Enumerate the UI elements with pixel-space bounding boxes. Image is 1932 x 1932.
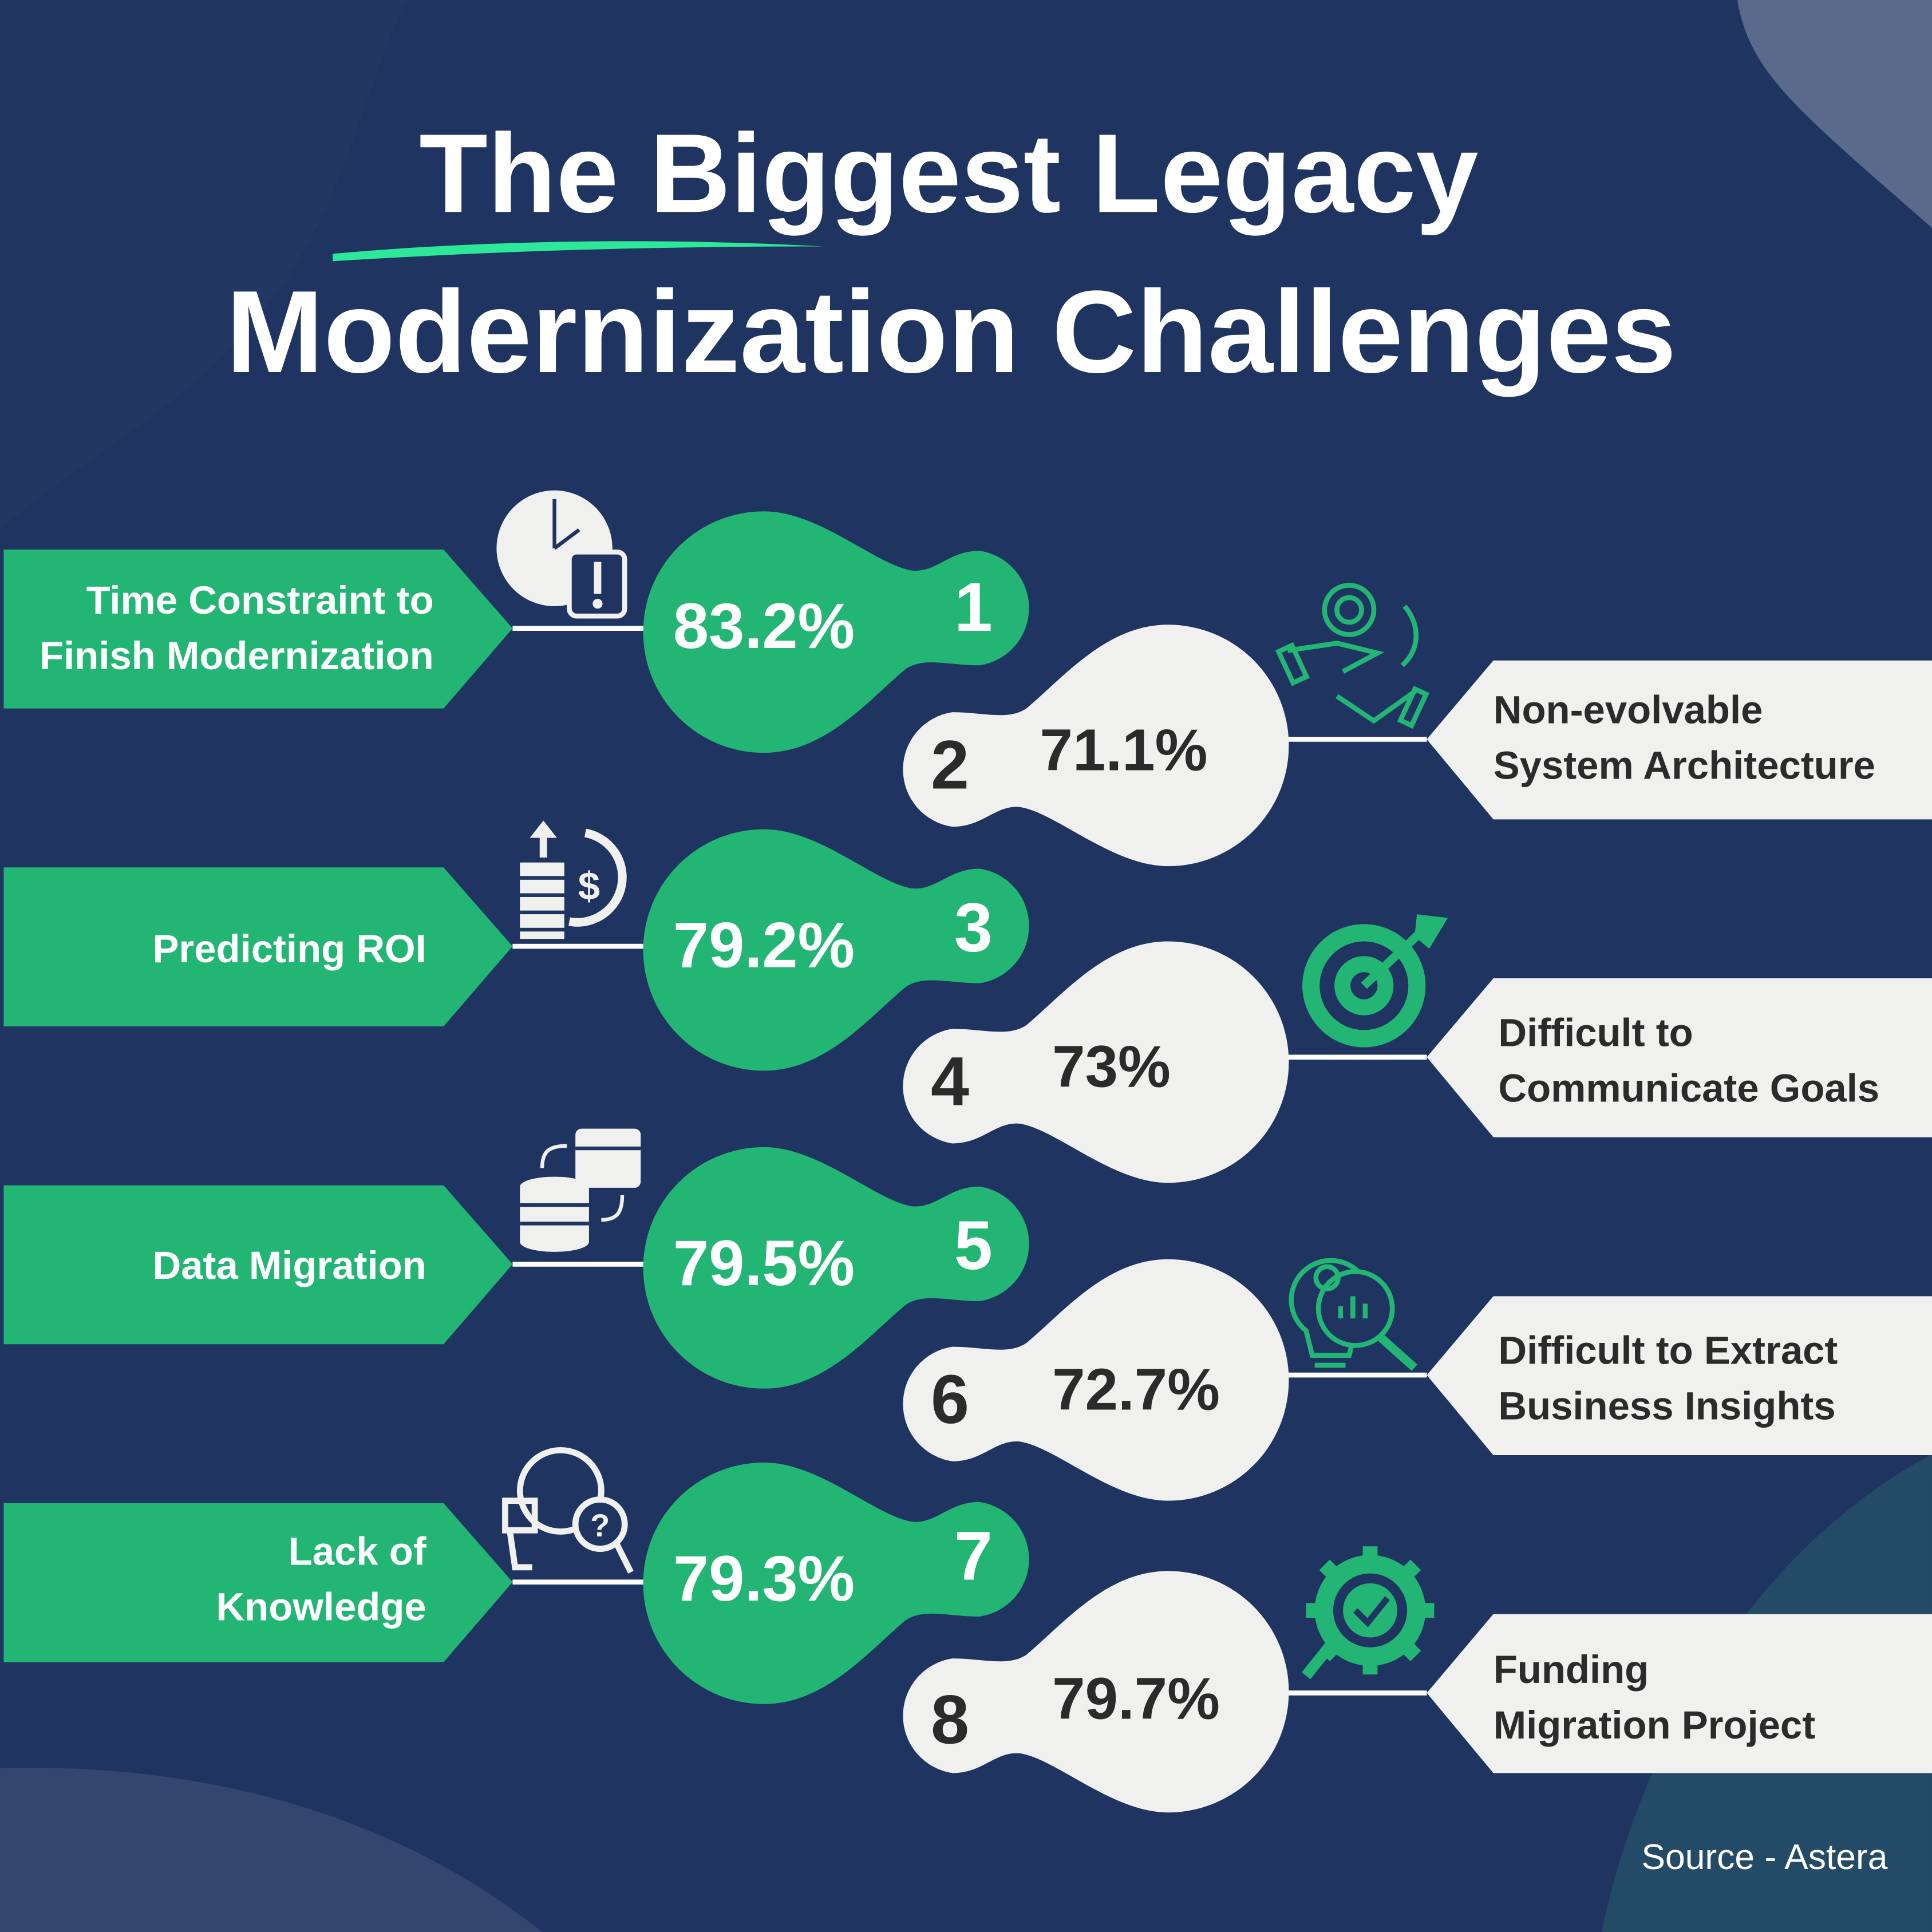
text: System Architecture [1494, 743, 1875, 787]
title [226, 110, 1676, 397]
green percentages and numbers: 1 [954, 568, 993, 646]
white percentages and numbers: 79.7% [1052, 1665, 1220, 1732]
source: Source - Astera [1641, 1837, 1888, 1877]
white percentages and numbers: 72.7% [1052, 1356, 1220, 1422]
text: Funding [1494, 1647, 1649, 1692]
text: Migration Project [1494, 1703, 1815, 1747]
white percentages and numbers: 73% [1052, 1033, 1171, 1099]
title: Modernization Challenges [226, 267, 1676, 397]
text: Time Constraint to [86, 578, 434, 622]
icon: data migration [520, 1129, 641, 1252]
green percentages and numbers: 79.2% [673, 910, 855, 981]
text: Knowledge [216, 1585, 426, 1629]
white percentages and numbers: 2 [931, 726, 969, 804]
connector lines [512, 629, 1427, 1693]
icon: ROI: $ [578, 864, 600, 908]
icon: clock alert [496, 491, 625, 616]
text: Data Migration [153, 1243, 426, 1287]
white percentages and numbers: 6 [931, 1361, 969, 1438]
title: The Biggest Legacy [419, 110, 1478, 236]
icon: gear hand [1278, 585, 1426, 725]
green percentages and numbers: 83.2% [673, 590, 855, 662]
icon: bulb insight [1291, 1261, 1415, 1368]
icon: target [1302, 914, 1448, 1048]
text: Non-evolvable [1494, 688, 1763, 732]
icon: knowledge [505, 1450, 631, 1572]
white percentages and numbers [931, 716, 1220, 1759]
icon: knowledge: ? [590, 1507, 610, 1543]
icon: gear check [1306, 1546, 1434, 1676]
right labels [1427, 661, 1932, 1773]
icon: ROI [520, 821, 622, 939]
green percentages and numbers [673, 568, 993, 1614]
text: Business Insights [1498, 1384, 1836, 1428]
left labels [3, 550, 512, 1662]
text: Finish Modernization [39, 634, 434, 678]
green percentages and numbers: 79.5% [673, 1227, 855, 1299]
green blobs [643, 511, 1029, 1704]
white blobs [903, 625, 1289, 1812]
text: Difficult to [1498, 1010, 1693, 1054]
green percentages and numbers: 5 [954, 1207, 993, 1284]
white percentages and numbers: 8 [931, 1681, 969, 1759]
text: Difficult to Extract [1498, 1329, 1838, 1373]
white percentages and numbers: 71.1% [1040, 716, 1207, 783]
text: Communicate Goals [1498, 1066, 1879, 1110]
green percentages and numbers: 3 [954, 889, 993, 966]
text: Lack of [289, 1530, 427, 1574]
green percentages and numbers: 7 [954, 1517, 993, 1594]
white percentages and numbers: 4 [931, 1043, 969, 1120]
text: Predicting ROI [152, 927, 426, 971]
green percentages and numbers: 79.3% [673, 1543, 855, 1614]
